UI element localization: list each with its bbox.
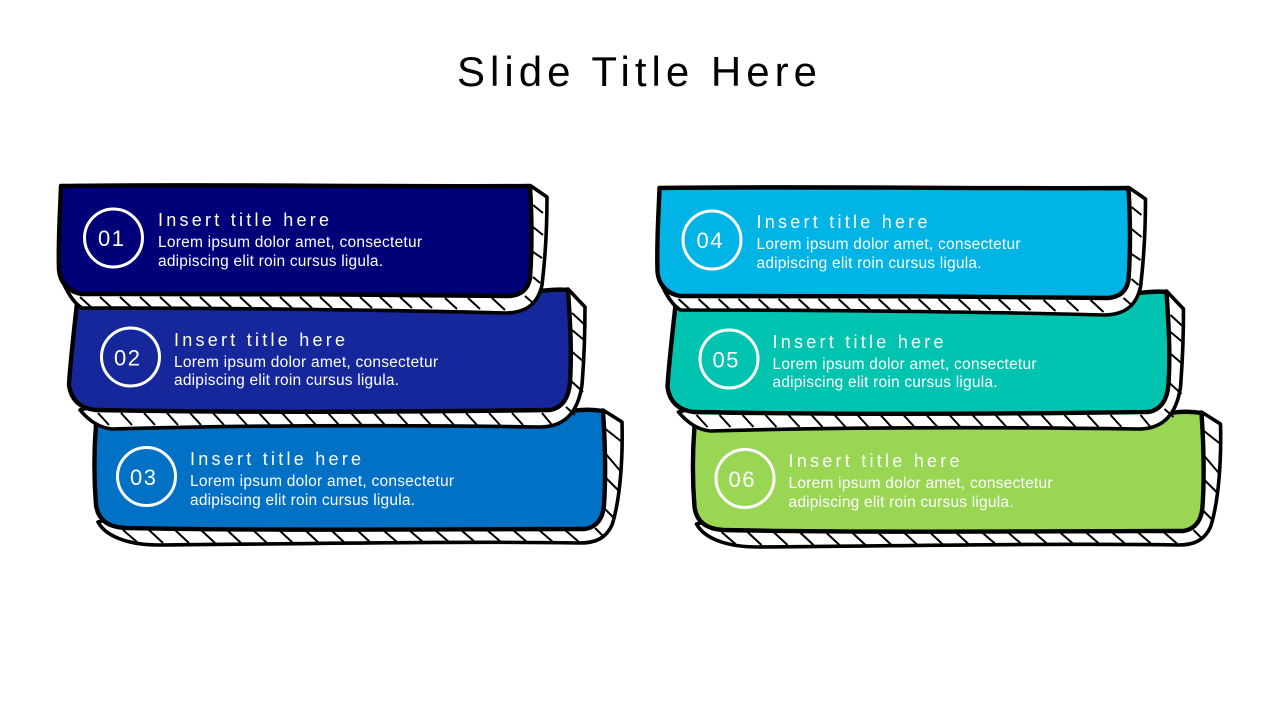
front face: item 05 bbox=[668, 292, 1169, 414]
text block: item 04 bbox=[756, 212, 1020, 272]
number badge: 01 bbox=[84, 209, 142, 267]
text block: item 03: Insert title here bbox=[190, 449, 361, 469]
text block: item 05 bbox=[772, 332, 1036, 391]
title: Slide Title Here bbox=[457, 48, 817, 95]
panel: item 03 bbox=[94, 410, 622, 545]
text block: item 04: adipiscing elit roin cursus ligula. bbox=[756, 255, 982, 272]
3D edge: item 03 bbox=[98, 410, 622, 545]
text block: item 01 bbox=[158, 210, 422, 270]
panel: item 02 bbox=[69, 289, 585, 429]
panel: item 06 bbox=[693, 412, 1221, 547]
text block: item 03: adipiscing elit roin cursus ligula. bbox=[190, 492, 415, 509]
text block: item 05: Lorem ipsum dolor amet, consectetur bbox=[772, 356, 1036, 373]
front face: item 01 bbox=[59, 185, 532, 296]
front face: item 06 bbox=[693, 412, 1204, 532]
3D edge: item 05 bbox=[678, 291, 1184, 431]
number badge: 05: 05 bbox=[712, 348, 738, 372]
number badge: 02 bbox=[102, 328, 160, 386]
text block: item 01: adipiscing elit roin cursus ligula. bbox=[158, 253, 383, 270]
number badge: 01: 01 bbox=[98, 226, 124, 251]
number badge: 02: 02 bbox=[114, 346, 140, 370]
front face: item 04 bbox=[657, 187, 1130, 298]
text block: item 06: Insert title here bbox=[788, 451, 960, 471]
text block: item 04: Insert title here bbox=[756, 212, 928, 232]
number badge: 03: 03 bbox=[130, 465, 156, 490]
text block: item 05: adipiscing elit roin cursus ligula. bbox=[772, 374, 998, 391]
text block: item 02 bbox=[174, 330, 438, 389]
text block: item 04: Lorem ipsum dolor amet, consectetur bbox=[756, 236, 1020, 253]
panel: item 01 bbox=[59, 185, 547, 313]
text block: item 06 bbox=[788, 451, 1052, 511]
text block: item 02: Insert title here bbox=[174, 330, 345, 350]
number badge: 06: 06 bbox=[728, 467, 754, 492]
number badge: 04 bbox=[683, 211, 741, 269]
text block: item 03: Lorem ipsum dolor amet, consectetur bbox=[190, 473, 454, 490]
text block: item 06: adipiscing elit roin cursus ligula. bbox=[788, 494, 1014, 511]
panel: item 05 bbox=[668, 291, 1184, 431]
text block: item 02: Lorem ipsum dolor amet, consectetur bbox=[174, 354, 438, 371]
3D edge: item 01 bbox=[62, 186, 547, 313]
number badge: 05 bbox=[700, 330, 758, 388]
front face: item 02 bbox=[69, 290, 571, 412]
front face: item 03 bbox=[94, 410, 605, 530]
3D edge: item 04 bbox=[660, 188, 1146, 315]
text block: item 06: Lorem ipsum dolor amet, consectetur bbox=[788, 475, 1052, 492]
number badge: 06 bbox=[716, 450, 774, 508]
text block: item 01: Lorem ipsum dolor amet, consectetur bbox=[158, 234, 422, 251]
text block: item 02: adipiscing elit roin cursus ligula. bbox=[174, 372, 399, 389]
3D edge: item 06 bbox=[696, 412, 1221, 547]
number badge: 03 bbox=[118, 448, 176, 506]
text block: item 01: Insert title here bbox=[158, 210, 329, 230]
text block: item 05: Insert title here bbox=[772, 332, 944, 352]
number badge: 04: 04 bbox=[696, 228, 722, 253]
panel: item 04 bbox=[657, 187, 1146, 315]
text block: item 03 bbox=[190, 449, 454, 509]
3D edge: item 02 bbox=[80, 289, 585, 429]
